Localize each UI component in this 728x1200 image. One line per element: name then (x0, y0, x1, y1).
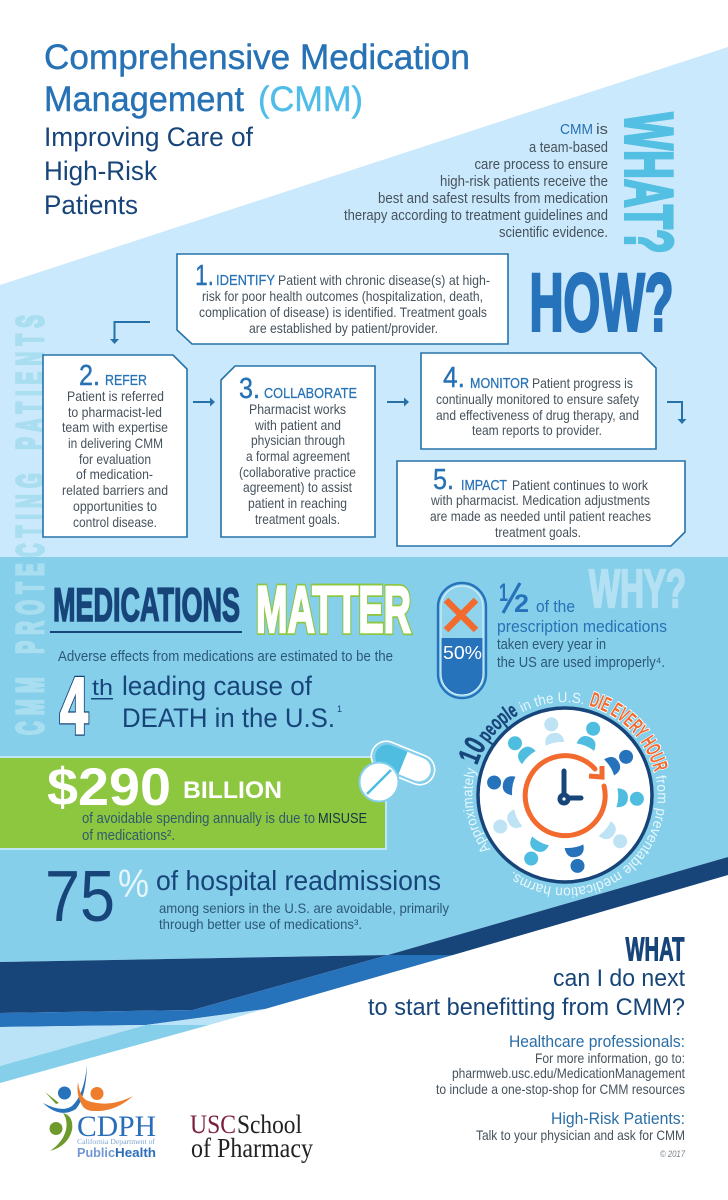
logo: USC School of Pharmacy (190, 1110, 313, 1163)
panel: 290 billion: BILLION (183, 777, 282, 804)
panel: step 3 collaborate: treatment goals. (255, 511, 340, 527)
clock hands (558, 771, 581, 806)
panel: step 4 monitor: and effectiveness of drug therapy, and (436, 407, 639, 423)
arrow: step 2 to step 3 (193, 398, 215, 406)
stat: half of prescription medications: of the (536, 597, 575, 616)
stat: half of prescription medications: taken every year in (497, 637, 606, 653)
text block: what is CMM: care process to ensure (474, 157, 608, 173)
subtitle: High-Risk (44, 156, 158, 186)
panel: step 4 monitor: continually monitored to ensure safety (436, 391, 639, 407)
text block: high-risk patients: High-Risk Patients: (551, 1110, 685, 1128)
arrow: step 3 to step 4 (387, 398, 409, 406)
panel: step 1 identify: IDENTIFY (216, 273, 275, 289)
panel: step 4 monitor (421, 353, 656, 449)
text block: what is CMM: scientific evidence. (499, 225, 608, 241)
stat: 4th leading cause of death: leading cause of (122, 671, 313, 701)
text block: what is CMM: a team-based (529, 140, 608, 156)
copyright: © 2017 (660, 1149, 686, 1160)
logo: CDPH: California Department of (77, 1137, 156, 1146)
panel: step 1 identify: complication of disease) is identified. Treatment goals (199, 304, 487, 320)
panel: 290 billion: of medications². (82, 828, 175, 844)
icon: pills (360, 737, 439, 802)
stat: 75 percent: 75 (45, 857, 115, 937)
panel: step 2 refer (43, 355, 187, 537)
clock face (478, 708, 652, 882)
heading: what can I do next (368, 930, 685, 1021)
panel: step 3 collaborate: agreement) to assist (243, 479, 352, 495)
stat: 4th leading cause of death (60, 661, 342, 750)
panel: step 3 collaborate: physician through (251, 432, 345, 448)
panel: step 4 monitor: Patient progress is (532, 375, 633, 391)
stat: half of prescription medications: 2 (514, 590, 529, 618)
panel: step 1 identify: Patient with chronic disease(s) at high- (278, 272, 490, 288)
people ring (486, 716, 644, 874)
stat: half of prescription medications: the US are used improperly⁴. (497, 655, 665, 671)
stat: half of prescription medications (497, 579, 667, 671)
heading: medications matter: MEDICATIONS (53, 578, 240, 631)
curved caption: DIE EVERY HOUR (588, 690, 668, 774)
heading: WHAT?: WHAT? (610, 112, 686, 254)
heading: what can I do next: can I do next (553, 965, 685, 992)
panel: step 3 collaborate: COLLABORATE (264, 386, 357, 402)
panel: 290 billion (0, 757, 386, 849)
text block: what is CMM: is (596, 122, 608, 138)
heading: medications matter (50, 572, 411, 646)
panel: step 5 impact: treatment goals. (495, 524, 581, 540)
curved caption: 10 (459, 738, 485, 765)
vertical text: CMM protecting patients: CMM PROTECTING PATIENTS (10, 309, 52, 735)
stat: 75 percent: through better use of medications³. (159, 916, 362, 932)
text block: healthcare professionals: to include a one-stop-shop for CMM resources (436, 1081, 685, 1097)
stat: half of prescription medications: 1 (499, 579, 508, 607)
panel: step 3 collaborate (221, 366, 375, 537)
logo: CDPH: Public (77, 1146, 115, 1160)
text block: what is CMM: best and safest results from medication (378, 191, 608, 207)
panel: step 1 identify (177, 254, 508, 344)
chart: clock with ten people (459, 690, 668, 898)
curved caption: Approximately (463, 768, 490, 852)
text block: what is CMM: CMM (560, 121, 593, 138)
panel: step 2 refer: 2. (79, 360, 100, 392)
curved caption: in the U.S. (518, 692, 583, 712)
text block: what is CMM: high-risk patients receive the (440, 174, 608, 190)
subtitle: Improving Care of (44, 122, 254, 152)
panel: 290 billion: of avoidable spending annually is due to (82, 811, 315, 827)
panel: step 1 identify: risk for poor health outcomes (hospitalization, death, (202, 288, 483, 304)
panel: step 2 refer: REFER (105, 373, 147, 389)
curved caption: from preventable medication harms. (513, 775, 666, 898)
panel: step 3 collaborate: a formal agreement (246, 448, 350, 464)
panel: step 3 collaborate: 3. (239, 373, 260, 405)
stat: 75 percent: among seniors in the U.S. are avoidable, primarily (159, 900, 449, 916)
logo: CDPH: CDPH (77, 1110, 156, 1143)
panel: step 2 refer: Patient is referred (67, 388, 164, 404)
panel: step 5 impact: with pharmacist. Medication adjustments (430, 492, 650, 508)
text block: high-risk patients (476, 1110, 685, 1143)
arrow: step 1 to step 2 (110, 322, 150, 344)
text block: what is CMM: therapy according to treatment guidelines and (344, 208, 608, 224)
panel: step 3 collaborate: (collaborative practice (239, 464, 356, 480)
stat: 4th leading cause of death: th (92, 675, 113, 700)
panel: step 2 refer: team with expertise (62, 419, 168, 435)
panel: 290 billion: $290 (47, 758, 171, 817)
panel: step 2 refer: opportunities to (73, 498, 157, 514)
panel: step 3 collaborate: patient in reaching (248, 495, 347, 511)
subtitle: Patients (44, 190, 138, 220)
title (44, 37, 470, 119)
stat: 4th leading cause of death: 4 (60, 661, 88, 750)
stat: 75 percent (45, 857, 449, 937)
logo: USC School of Pharmacy: School (237, 1110, 302, 1139)
stat: 4th leading cause of death: DEATH in the U.S. (122, 703, 335, 733)
panel: step 4 monitor: team reports to provider. (472, 422, 602, 438)
logo: CDPH: Health (115, 1146, 156, 1160)
panel: step 2 refer: related barriers and (62, 482, 168, 498)
panel: step 5 impact: are made as needed until patient reaches (430, 508, 651, 524)
logo: USC School of Pharmacy: USC (190, 1110, 236, 1139)
heading: what can I do next: WHAT (626, 930, 684, 968)
heading: what can I do next: to start benefitting from CMM? (368, 994, 685, 1021)
arrow: step 4 to step 5 (667, 402, 686, 424)
logo: CDPH (43, 1065, 156, 1160)
curved caption: people (479, 706, 518, 745)
panel: step 2 refer: in delivering CMM (68, 435, 163, 451)
title: (CMM) (258, 79, 363, 119)
panel: step 5 impact: IMPACT (461, 478, 507, 494)
heading: medications matter: MATTER (256, 572, 411, 646)
panel: step 2 refer: for evaluation (79, 451, 151, 467)
stat: 4th leading cause of death: 1 (337, 704, 342, 714)
curved caption (459, 690, 668, 898)
panel: step 4 monitor: MONITOR (470, 376, 529, 392)
orange cycle arrow (525, 756, 605, 836)
stat: half of prescription medications: prescription medications (497, 617, 667, 636)
panel: step 2 refer: to pharmacist-led (68, 404, 162, 420)
title: Comprehensive Medication (44, 37, 470, 77)
title: Management (44, 79, 244, 119)
icon: half pill 50 percent (438, 583, 486, 698)
text block: healthcare professionals: For more information, go to: (535, 1050, 685, 1066)
text block: healthcare professionals: pharmweb.usc.edu/MedicationManagement (452, 1065, 685, 1081)
icon: half pill 50 percent: 50% (443, 643, 482, 663)
panel: step 2 refer: control disease. (73, 514, 157, 530)
text block: healthcare professionals (436, 1033, 685, 1097)
panel: step 5 impact (397, 461, 685, 546)
panel: step 5 impact: Patient continues to work (512, 477, 649, 493)
logo: USC School of Pharmacy: of Pharmacy (191, 1133, 313, 1163)
text block: what is CMM (344, 121, 608, 241)
panel: step 4 monitor: 4. (443, 362, 465, 394)
stat: 75 percent: % (118, 863, 149, 906)
text: adverse effects: Adverse effects from medications are estimated to be the (58, 649, 393, 665)
text block: healthcare professionals: Healthcare professionals: (509, 1033, 685, 1051)
panel: step 2 refer: of medication- (76, 466, 153, 482)
stat: 75 percent: of hospital readmissions (156, 865, 441, 896)
panel: step 3 collaborate: with patient and (254, 417, 341, 433)
stat: 4th leading cause of death: 4 (60, 661, 88, 750)
panel: step 1 identify: 1. (195, 260, 214, 292)
panel: 290 billion: MISUSE (318, 811, 367, 827)
panel: step 5 impact: 5. (433, 464, 454, 496)
heading: medications matter: MATTER (256, 572, 411, 646)
text block: high-risk patients: Talk to your physician and ask for CMM (476, 1127, 685, 1143)
panel: step 1 identify: are established by patient/provider. (249, 320, 438, 336)
panel: step 3 collaborate: Pharmacist works (249, 401, 346, 417)
subtitle (44, 122, 254, 220)
